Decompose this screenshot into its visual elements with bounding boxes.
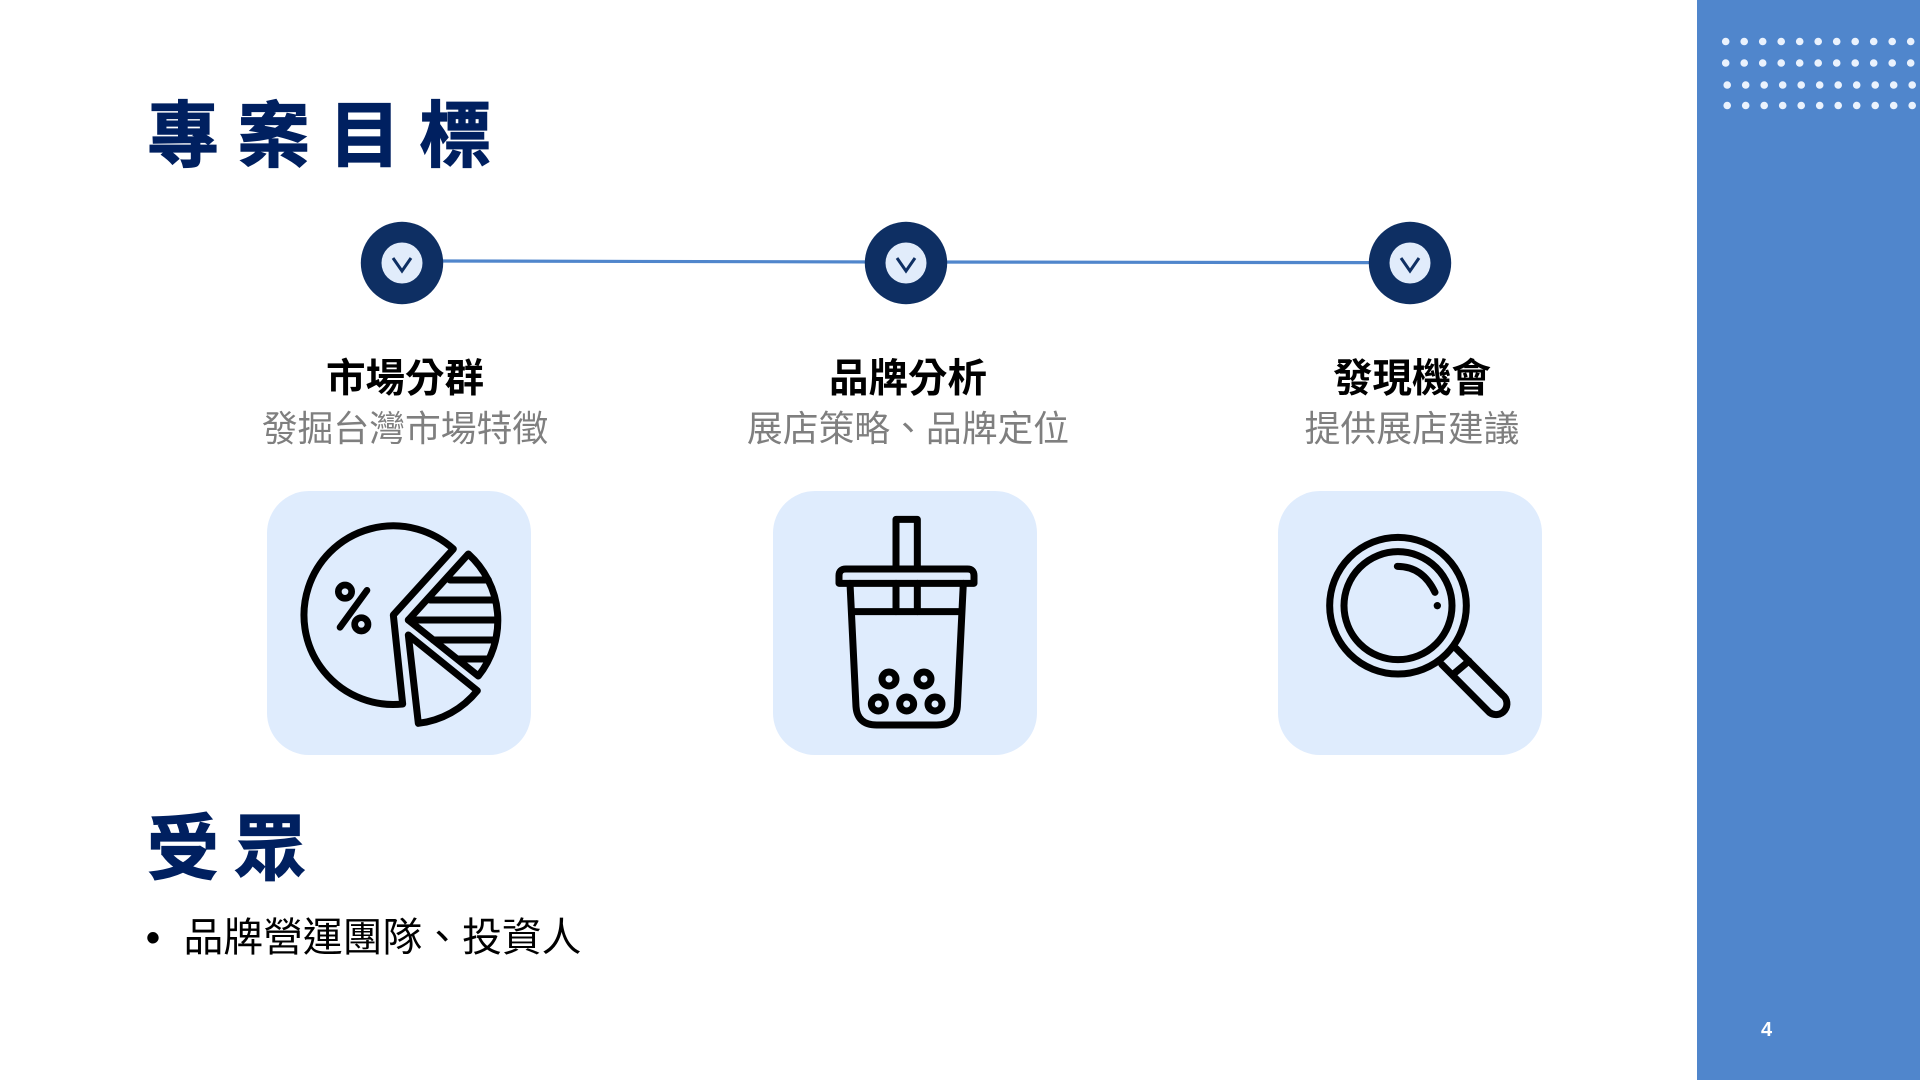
side panel (1697, 0, 1920, 1080)
card: pie chart (267, 491, 531, 755)
icon: pie chart (300, 522, 502, 727)
description: brand analysis: 展店策略、品牌定位 (747, 409, 1069, 449)
heading: market segmentation: 市場分群 (326, 357, 484, 401)
timeline node 2 (864, 222, 948, 304)
page number: 4 (1761, 1019, 1772, 1041)
heading: audience: 受眾 (147, 810, 321, 890)
bullet text: audience: • (146, 916, 160, 960)
timeline node 3 (1368, 222, 1452, 304)
title: 專案目標 (147, 97, 510, 177)
card: magnifier (1278, 491, 1542, 755)
description: discover opportunities: 提供展店建議 (1305, 409, 1519, 449)
card: bubble tea (773, 491, 1037, 755)
icon: bubble tea cup (836, 516, 978, 728)
bullet text: audience: 品牌營運團隊、投資人 (184, 916, 581, 960)
timeline node 1 (360, 222, 444, 304)
icon: magnifying glass (1326, 534, 1510, 718)
heading: discover opportunities: 發現機會 (1333, 357, 1491, 401)
heading: brand analysis: 品牌分析 (829, 357, 987, 401)
description: market segmentation: 發掘台灣市場特徵 (262, 409, 548, 449)
